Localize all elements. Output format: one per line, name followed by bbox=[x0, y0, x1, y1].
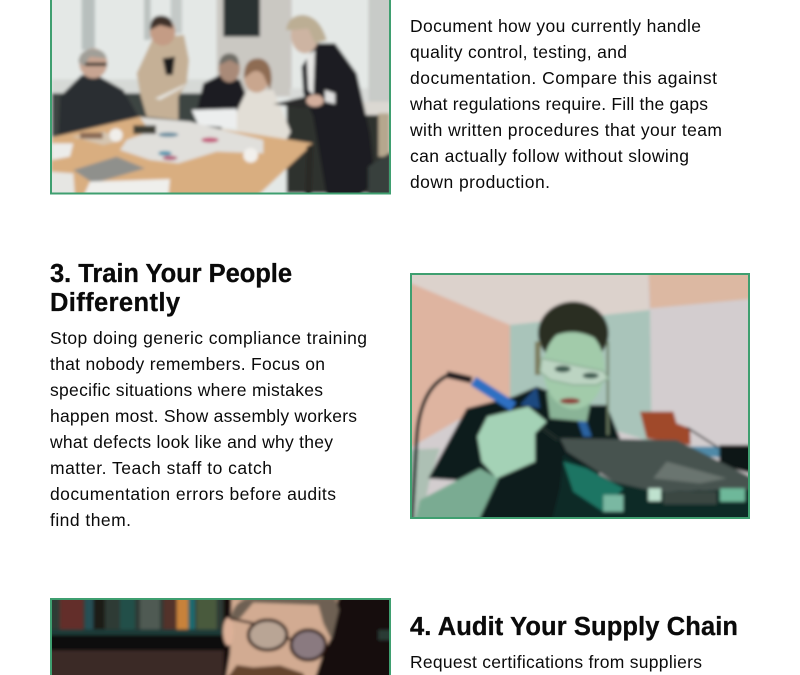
heading: step 3: Differently bbox=[50, 289, 181, 317]
text block: step 3 description: matter. Teach staff to catch bbox=[50, 458, 272, 478]
head bbox=[225, 593, 338, 675]
text block: step 3 description: happen most. Show assembly workers bbox=[50, 406, 357, 426]
heading: step 3 bbox=[50, 260, 292, 317]
vise bbox=[640, 412, 691, 445]
people bbox=[58, 75, 138, 135]
text block: step 3 description: what defects look like and why they bbox=[49, 432, 333, 452]
board bbox=[560, 438, 757, 492]
text block: step 3 description bbox=[49, 328, 367, 530]
text block: step 2 description: with written procedures that your team bbox=[409, 120, 722, 140]
photo: technician soldering circuit board bbox=[403, 267, 757, 528]
text block: step 2 description: down production. bbox=[410, 172, 550, 192]
photo: man with glasses reading bbox=[50, 598, 391, 675]
text block: step 2 description: quality control, testing, and bbox=[410, 42, 627, 62]
text block: step 3 description: specific situations where mistakes bbox=[50, 380, 323, 400]
text block: step 2 description: can actually follow without slowing bbox=[410, 146, 689, 166]
heading: step 3: 3. Train Your People bbox=[50, 260, 292, 288]
text block: step 2 description bbox=[409, 16, 722, 192]
torso bbox=[428, 387, 620, 528]
text block: step 4 description: Request certifications from suppliers bbox=[410, 652, 702, 672]
text block: step 2 description: what regulations require. Fill the gaps bbox=[409, 94, 708, 114]
text block: step 2 description: documentation. Compare this against bbox=[410, 68, 717, 88]
woman right bbox=[302, 43, 375, 197]
goggles bbox=[540, 358, 608, 385]
hair and face bbox=[536, 300, 610, 354]
text block: step 2 description: Document how you currently handle bbox=[410, 16, 701, 36]
table bbox=[50, 117, 313, 197]
text block: step 3 description: documentation errors before audits bbox=[50, 484, 336, 504]
hand bbox=[477, 407, 547, 478]
iron and cable bbox=[412, 375, 448, 522]
text block: step 3 description: that nobody remembers. Focus on bbox=[50, 354, 325, 374]
text block: step 3 description: Stop doing generic compliance training bbox=[50, 328, 367, 348]
heading: step 4: 4. Audit Your Supply Chain bbox=[410, 613, 738, 641]
text block: step 3 description: find them. bbox=[50, 510, 131, 530]
photo: business team meeting around table bbox=[47, 0, 393, 197]
